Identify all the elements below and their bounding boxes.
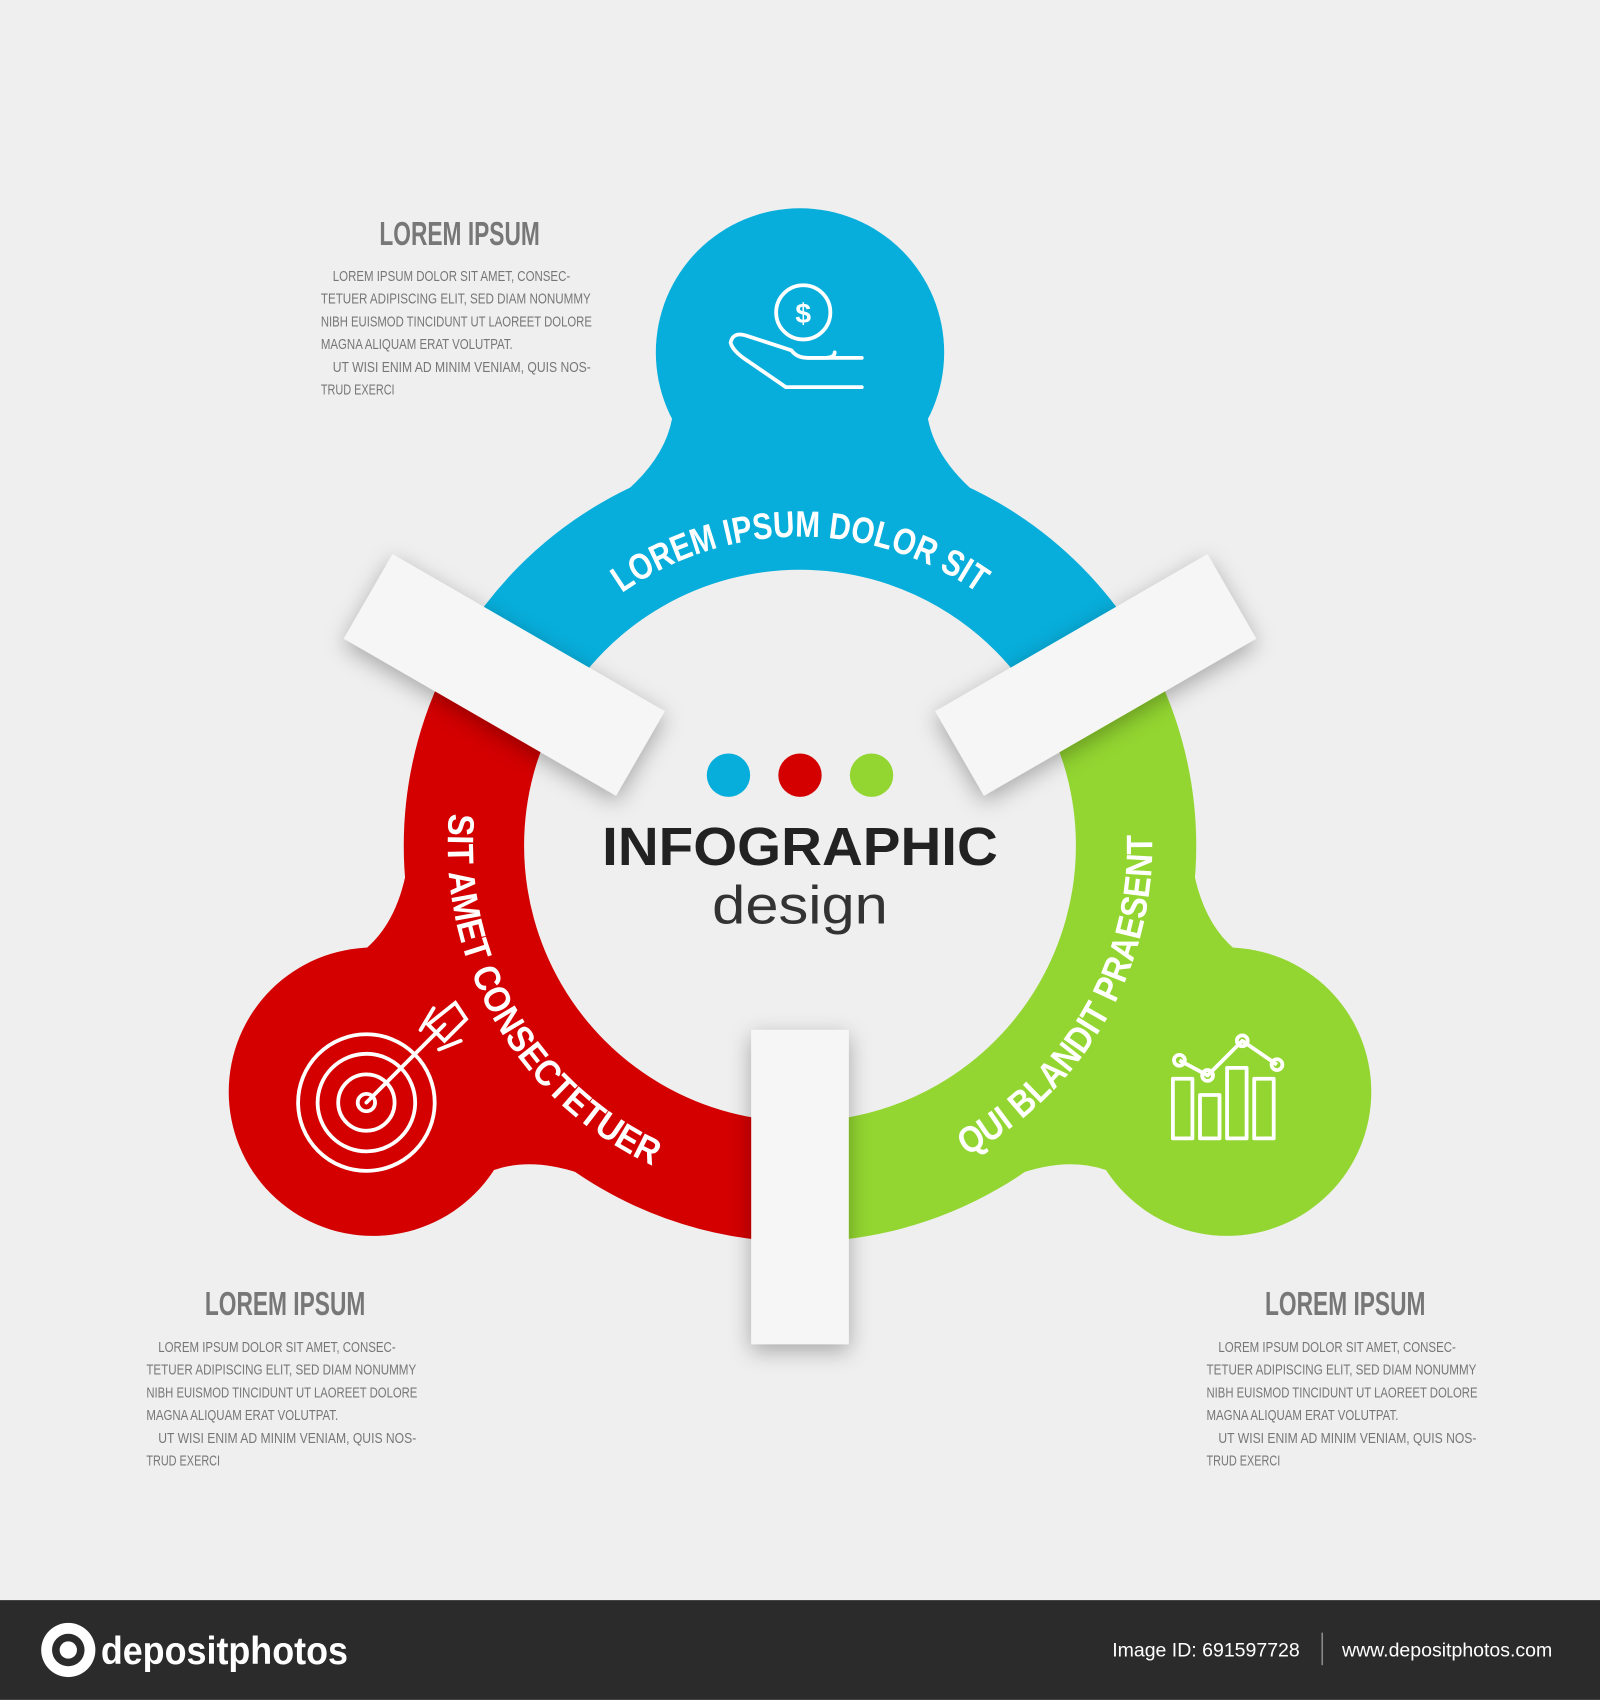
curved label: green: QUI BLANDIT PRAESENT	[959, 835, 1152, 1154]
text block: bottom right	[1207, 1286, 1478, 1470]
text block: top left: UT WISI ENIM AD MINIM VENIAM, QUIS NOS-	[333, 359, 591, 376]
icon: hand with coin	[731, 285, 862, 387]
footer bar: depositphotos	[101, 1630, 348, 1673]
text block: bottom right: MAGNA ALIQUAM ERAT VOLUTPAT.	[1207, 1407, 1398, 1424]
text block: bottom left: TETUER ADIPISCING ELIT, SED DIAM NONUMMY	[146, 1362, 416, 1379]
center title	[602, 817, 998, 936]
text block: bottom right: TRUD EXERCI	[1207, 1453, 1280, 1470]
panel: blue segment	[509, 208, 1091, 678]
panel: green segment	[800, 678, 1371, 1280]
text block: bottom left: MAGNA ALIQUAM ERAT VOLUTPAT.	[146, 1407, 338, 1424]
text block: bottom right: LOREM IPSUM DOLOR SIT AMET, CONSEC-	[1218, 1339, 1456, 1356]
text block: top left: MAGNA ALIQUAM ERAT VOLUTPAT.	[321, 336, 513, 353]
icon: bar chart	[1173, 1035, 1282, 1138]
text block: top left: TETUER ADIPISCING ELIT, SED DIAM NONUMMY	[321, 291, 591, 308]
icon: target with arrow	[298, 1003, 466, 1171]
text block: bottom right: UT WISI ENIM AD MINIM VENIAM, QUIS NOS-	[1218, 1430, 1476, 1447]
text block: bottom left: LOREM IPSUM	[205, 1286, 365, 1323]
text block: bottom right: NIBH EUISMOD TINCIDUNT UT LAOREET DOLORE	[1207, 1384, 1478, 1401]
panel: red segment	[229, 678, 800, 1280]
text block: top left: LOREM IPSUM DOLOR SIT AMET, CONSEC-	[333, 268, 570, 285]
text block: bottom right: TETUER ADIPISCING ELIT, SED DIAM NONUMMY	[1207, 1362, 1476, 1379]
center title: design	[712, 876, 888, 936]
center title: INFOGRAPHIC	[602, 817, 998, 877]
text block: bottom left	[146, 1286, 417, 1470]
text block: top left: TRUD EXERCI	[321, 382, 395, 399]
text block: bottom right: LOREM IPSUM	[1265, 1286, 1425, 1323]
curved label: red: SIT AMET CONSECTETUER	[448, 814, 660, 1166]
curved label: blue: LOREM IPSUM DOLOR SIT	[609, 511, 992, 592]
text block: top left: LOREM IPSUM	[379, 216, 540, 253]
text block: bottom left: UT WISI ENIM AD MINIM VENIAM, QUIS NOS-	[158, 1430, 416, 1447]
footer bar: Image ID: 691597728	[1112, 1640, 1300, 1662]
footer bar	[0, 1600, 1600, 1700]
text block: bottom left: TRUD EXERCI	[146, 1453, 220, 1470]
center dots	[707, 754, 893, 797]
text block: bottom left: LOREM IPSUM DOLOR SIT AMET, CONSEC-	[158, 1339, 396, 1356]
text block: top left: NIBH EUISMOD TINCIDUNT UT LAOREET DOLORE	[321, 313, 592, 330]
text block: bottom left: NIBH EUISMOD TINCIDUNT UT LAOREET DOLORE	[146, 1384, 417, 1401]
text block: top left	[321, 216, 592, 399]
icon: hand with coin: $	[795, 297, 811, 329]
white dividers	[344, 554, 1256, 1344]
footer bar: www.depositphotos.com	[1341, 1640, 1552, 1662]
